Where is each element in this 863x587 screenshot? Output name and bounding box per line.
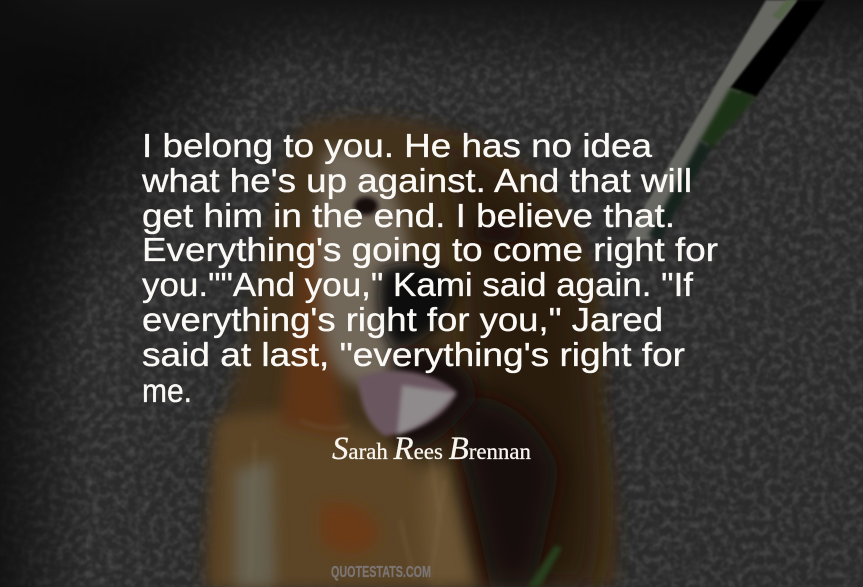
quote line 8: me. <box>142 372 192 409</box>
body and fur <box>205 117 617 587</box>
author name: Sarah Rees Brennan <box>332 431 531 467</box>
leash <box>625 0 826 240</box>
quote line 1: I belong to you. He has no idea <box>142 127 653 164</box>
collar <box>528 545 562 587</box>
watermark: QUOTESTATS.COM <box>331 564 431 581</box>
quote line 4: Everything's going to come right for <box>142 231 718 268</box>
dog <box>205 117 617 587</box>
quote line 6: everything's right for you," Jared <box>142 301 663 338</box>
tongue <box>358 371 457 436</box>
quote line 3: get him in the end. I believe that. <box>142 197 675 234</box>
quote line 2: what he's up against. And that will <box>141 162 692 199</box>
eye <box>354 197 378 215</box>
quote text <box>141 127 718 409</box>
muzzle <box>318 148 416 386</box>
nose and mouth <box>378 263 456 350</box>
quote line 7: said at last, "everything's right for <box>142 336 685 373</box>
fur streaks <box>250 420 445 580</box>
quote line 5: you.""And you," Kami said again. "If <box>142 266 694 303</box>
